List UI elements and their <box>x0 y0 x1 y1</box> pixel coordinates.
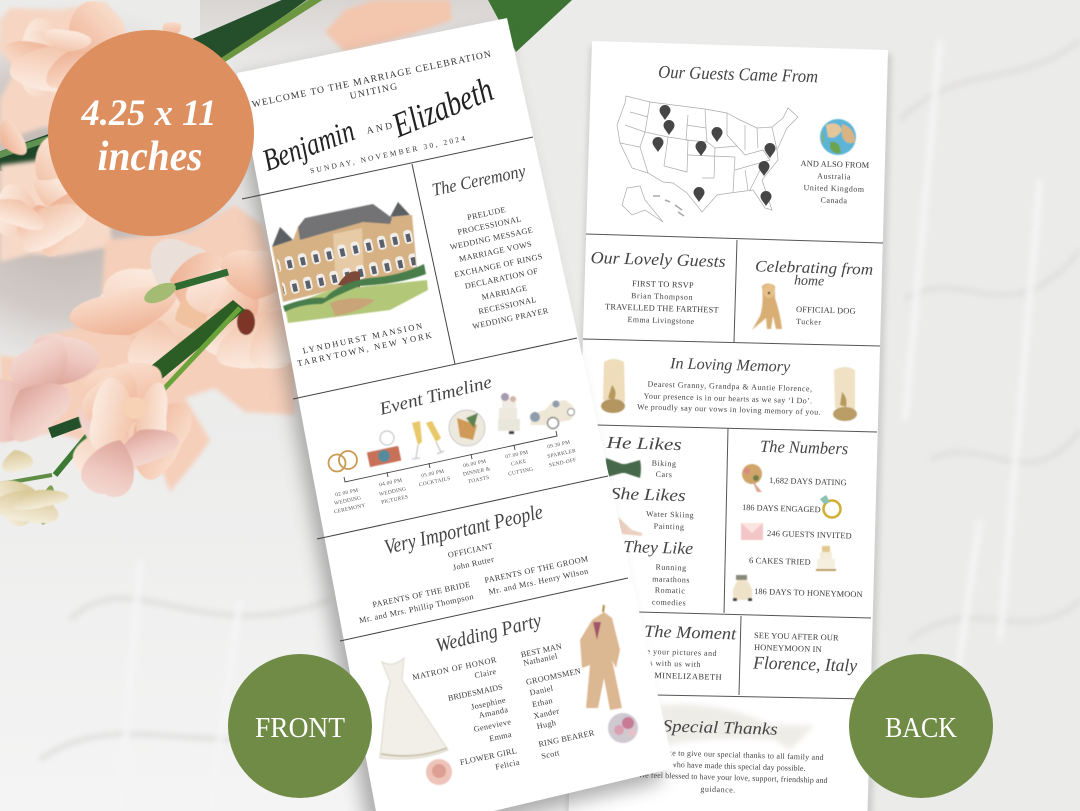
flower arrangement <box>0 0 572 532</box>
panel: the numbers: 1,682 DAYS DATING <box>769 476 847 487</box>
icon: wedding cake <box>816 546 836 571</box>
text: wedding party left column: Claire <box>474 667 497 680</box>
text: wedding party left column: Felicia <box>494 758 521 772</box>
panel: he likes, she likes, they like: marathons <box>652 574 690 585</box>
panel: very important people: OFFICIANT <box>447 541 494 560</box>
panel: celebrating from home: Tucker <box>796 317 822 327</box>
badge: front: FRONT <box>255 712 345 744</box>
panel: special thanks: Special Thanks <box>662 716 778 739</box>
panel: welcome header: SUNDAY, NOVEMBER 30, 2024 <box>309 134 466 175</box>
icon: left candle <box>601 359 625 413</box>
panel: he likes, she likes, they like: Painting <box>654 522 685 531</box>
text: wedding party right column <box>520 642 595 761</box>
panel: in loving memory: In Loving Memory <box>669 355 791 376</box>
timeline labels: SEND-OFF <box>549 457 577 469</box>
panel: the numbers: The Numbers <box>760 437 849 458</box>
timeline axis <box>344 431 557 482</box>
flower bud <box>0 469 70 532</box>
panel: he likes, she likes, they like: They Like <box>623 537 694 558</box>
panel: the ceremony <box>430 160 550 331</box>
panel: in loving memory: We proudly say our vows in loving memory of you. <box>637 402 821 417</box>
text: and also from: United Kingdom <box>803 183 865 194</box>
badge: size <box>48 30 254 236</box>
icon: wedding dress <box>380 658 448 759</box>
panel: special thanks <box>638 704 828 795</box>
panel: very important people: Very Important People <box>382 499 545 559</box>
panel: honeymoon <box>752 631 857 676</box>
panel divider lines <box>242 137 628 641</box>
card shadow <box>232 30 662 811</box>
stems over the flowers <box>0 272 245 526</box>
panel divider lines <box>583 234 883 699</box>
panel: very important people: PARENTS OF THE BRIDE <box>372 580 471 609</box>
text: wedding party right column: Daniel <box>529 684 554 697</box>
text: wedding party right column: Ethan <box>531 696 554 709</box>
flower: beside the card <box>181 247 332 376</box>
icon: rose <box>426 759 452 785</box>
panel: celebrating from home: home <box>794 274 824 289</box>
panel: event timeline: Event Timeline <box>376 372 494 419</box>
text: wedding party left column: Genevieve <box>473 717 512 734</box>
panel: the numbers: 246 GUESTS INVITED <box>767 529 852 541</box>
panel: in loving memory: Dearest Granny, Grandpa & Auntie Florence, <box>647 380 813 393</box>
panel: celebrating from home: Celebrating from <box>755 258 873 279</box>
panel: very important people <box>358 499 590 625</box>
names in script: Benjamin <box>258 112 359 178</box>
panel: venue: LYNDHURST MANSION <box>302 320 423 356</box>
panel: welcome header: AND <box>366 120 393 137</box>
panel: the ceremony: PRELUDE <box>466 205 507 222</box>
badge: size: inches <box>98 134 202 180</box>
panel: the ceremony: WEDDING PRAYER <box>472 306 550 331</box>
text: wedding party right column: BEST MAN <box>520 642 563 659</box>
panel: the numbers <box>733 437 863 601</box>
icon: honeymoon car <box>733 575 752 601</box>
panel: he likes, she likes, they like: comedies <box>652 597 686 608</box>
flower: top left <box>0 0 181 162</box>
flower: under the badge <box>0 128 109 263</box>
card shadow <box>566 46 892 811</box>
flower: large lower <box>65 357 201 503</box>
panel: welcome header: UNITING <box>349 81 398 102</box>
text: and also from: Canada <box>820 196 848 205</box>
text: wedding party right column: Hugh <box>536 718 557 731</box>
text: wedding party left column <box>411 655 521 772</box>
panel: the numbers: 186 DAYS TO HONEYMOON <box>754 587 863 599</box>
icon: watercolor globe <box>820 119 856 155</box>
panel: event timeline <box>328 372 577 515</box>
flower: pink left <box>0 328 103 474</box>
badge: back <box>849 654 993 798</box>
panel: honeymoon: Florence, Italy <box>752 652 857 676</box>
text: wedding party left column: BRIDESMAIDS <box>447 682 504 703</box>
icon: dinner plate <box>449 410 485 446</box>
panel: honeymoon: SEE YOU AFTER OUR <box>754 631 839 643</box>
text: wedding party right column: Nathaniel <box>522 651 559 668</box>
panel: welcome header: WELCOME TO THE MARRIAGE CELEBRATION <box>251 49 492 110</box>
text: and also from: AND ALSO FROM <box>800 159 870 170</box>
panel: the moment: #BENJAMINELIZABETH <box>621 670 722 682</box>
timeline labels <box>333 440 577 515</box>
panel: he likes, she likes, they like <box>605 433 694 608</box>
panel: the numbers: 186 DAYS ENGAGED <box>742 503 821 514</box>
flower masses <box>0 0 452 492</box>
timeline labels: CUTTING <box>508 466 534 478</box>
leaves behind flowers <box>0 0 572 175</box>
timeline labels: CAKE <box>510 458 528 468</box>
panel: special thanks: guidance. <box>700 784 736 795</box>
panel: our lovely guests: Brian Thompson <box>631 291 693 302</box>
panel: very important people: Mr. and Mrs. Phillip Thompson <box>358 592 475 625</box>
front card <box>232 18 674 811</box>
icon: vintage car <box>530 400 575 428</box>
text: wedding party left column: Amanda <box>478 705 509 720</box>
panel: celebrating from home <box>752 258 873 330</box>
back card <box>566 41 892 811</box>
timeline labels: 05.00 PM <box>421 469 445 479</box>
timeline labels: WEDDING <box>334 495 362 507</box>
location pins <box>652 105 776 206</box>
panel: our lovely guests: Emma Livingstone <box>627 315 695 326</box>
panel: he likes, she likes, they like: Water Skiing <box>646 509 694 520</box>
card sheet <box>568 41 888 811</box>
text: wedding party right column: Xander <box>533 706 560 721</box>
panel: he likes, she likes, they like: Biking <box>652 459 677 468</box>
icon: wedding rings <box>328 451 357 472</box>
panel: the moment: moments with us with <box>620 658 701 669</box>
icon: right candle <box>833 367 857 421</box>
panel: he likes, she likes, they like: He Likes <box>605 433 682 454</box>
panel: the ceremony: The Ceremony <box>430 160 527 200</box>
panel: special thanks: We feel blessed to have your love, support, friendship and <box>638 770 828 785</box>
panel: very important people: John Rutter <box>452 555 495 572</box>
text: wedding party left column: Emma <box>488 730 513 743</box>
panel: the ceremony: WEDDING MESSAGE <box>449 225 534 252</box>
map of the USA <box>617 96 798 222</box>
panel: wedding party <box>380 605 638 785</box>
panel: the ceremony: MARRIAGE <box>481 283 528 302</box>
panel: the moment: Share your pictures and <box>630 646 717 658</box>
text: and also from <box>800 159 870 205</box>
icon: camera <box>367 431 401 467</box>
icon: pink envelope <box>741 523 763 540</box>
timeline labels: SPARKLER <box>547 448 577 460</box>
icon: orchid <box>608 713 638 743</box>
panel: he likes, she likes, they like: Cars <box>656 470 673 479</box>
panel: welcome header: Elizabeth <box>386 70 499 145</box>
heading: Our Guests Came From <box>658 62 818 86</box>
panel: venue: TARRYTOWN, NEW YORK <box>296 330 433 368</box>
panel: the ceremony: EXCHANGE OF RINGS <box>453 252 544 279</box>
badge: back: BACK <box>885 712 957 744</box>
timeline labels: WEDDING <box>379 486 407 498</box>
panel: our lovely guests <box>590 248 726 326</box>
text: wedding party right column: GROOMSMEN <box>525 666 582 687</box>
icon: tan suit <box>580 605 622 710</box>
panel: in loving memory <box>601 355 857 421</box>
icon: pink shoe <box>616 515 642 536</box>
timeline labels: CEREMONY <box>333 503 366 515</box>
panel: the ceremony: MARRIAGE VOWS <box>458 239 533 264</box>
flower: central <box>66 230 258 380</box>
decorative ribbon <box>660 704 815 750</box>
icon: green bow tie <box>606 458 641 478</box>
timeline labels: 07.00 PM <box>505 450 529 460</box>
panel: our lovely guests: TRAVELLED THE FARTHEST <box>605 302 719 315</box>
text: wedding party right column: RING BEARER <box>538 728 595 749</box>
card sheet <box>237 18 674 811</box>
timeline labels: DINNER & <box>463 466 492 478</box>
panel: the ceremony: RECESSIONAL <box>478 295 537 316</box>
badge: front <box>228 654 372 798</box>
panel: honeymoon: HONEYMOON IN <box>754 643 822 654</box>
panel: the ceremony: DECLARATION OF <box>464 266 539 291</box>
icon: golden retriever <box>752 284 782 330</box>
panel: the moment: The Moment <box>644 622 738 643</box>
panel: celebrating from home: OFFICIAL DOG <box>796 305 856 316</box>
icon: champagne glasses <box>412 421 444 459</box>
timeline labels: TOASTS <box>468 475 490 485</box>
icon: wedding cake <box>498 393 520 434</box>
panel: the numbers: 6 CAKES TRIED <box>749 556 811 567</box>
text: wedding party left column: FLOWER GIRL <box>459 746 518 767</box>
icon: bouquet <box>742 464 762 492</box>
panel: welcome header <box>251 49 499 178</box>
panel: he likes, she likes, they like: Running <box>655 563 687 572</box>
timeline labels: 04.00 PM <box>379 478 403 488</box>
panel: venue <box>272 202 433 368</box>
panel: in loving memory: Your presence is in our hearts as we say ‘I Do’. <box>643 391 813 406</box>
text: wedding party left column: Josephine <box>470 695 507 712</box>
panel: our lovely guests: Our Lovely Guests <box>590 248 726 271</box>
badge: size: 4.25 x 11 <box>81 93 216 134</box>
panel: our guests came from <box>617 62 870 222</box>
panel: the moment <box>620 622 738 682</box>
icon: engagement ring <box>820 495 840 518</box>
text: wedding party left column: MATRON OF HONOR <box>411 655 498 682</box>
timeline labels: 02.00 PM <box>335 488 359 498</box>
text: wedding party right column: Scott <box>540 748 561 761</box>
illustration: watercolor mansion <box>272 202 428 323</box>
panel: our lovely guests: FIRST TO RSVP <box>632 279 694 290</box>
panel: he likes, she likes, they like: Romatic <box>655 586 686 595</box>
panel: very important people: Mr. and Mrs. Henry Wilson <box>488 567 589 597</box>
timeline labels: 09.30 PM <box>547 440 571 450</box>
timeline labels: COCKTAILS <box>418 476 451 488</box>
timeline labels: PICTURES <box>381 494 409 506</box>
text: and also from: Australia <box>817 172 851 182</box>
panel: very important people: PARENTS OF THE GROOM <box>484 554 590 585</box>
panel: wedding party: Wedding Party <box>433 609 544 657</box>
panel: the ceremony: PROCESSIONAL <box>457 214 522 237</box>
panel: he likes, she likes, they like: She Likes <box>610 484 686 505</box>
panel: special thanks: friends who have made this special day possible. <box>646 759 806 773</box>
timeline labels: 06.00 PM <box>463 459 487 469</box>
panel: special thanks: We'd like to give our special thanks to all family and <box>644 748 824 762</box>
